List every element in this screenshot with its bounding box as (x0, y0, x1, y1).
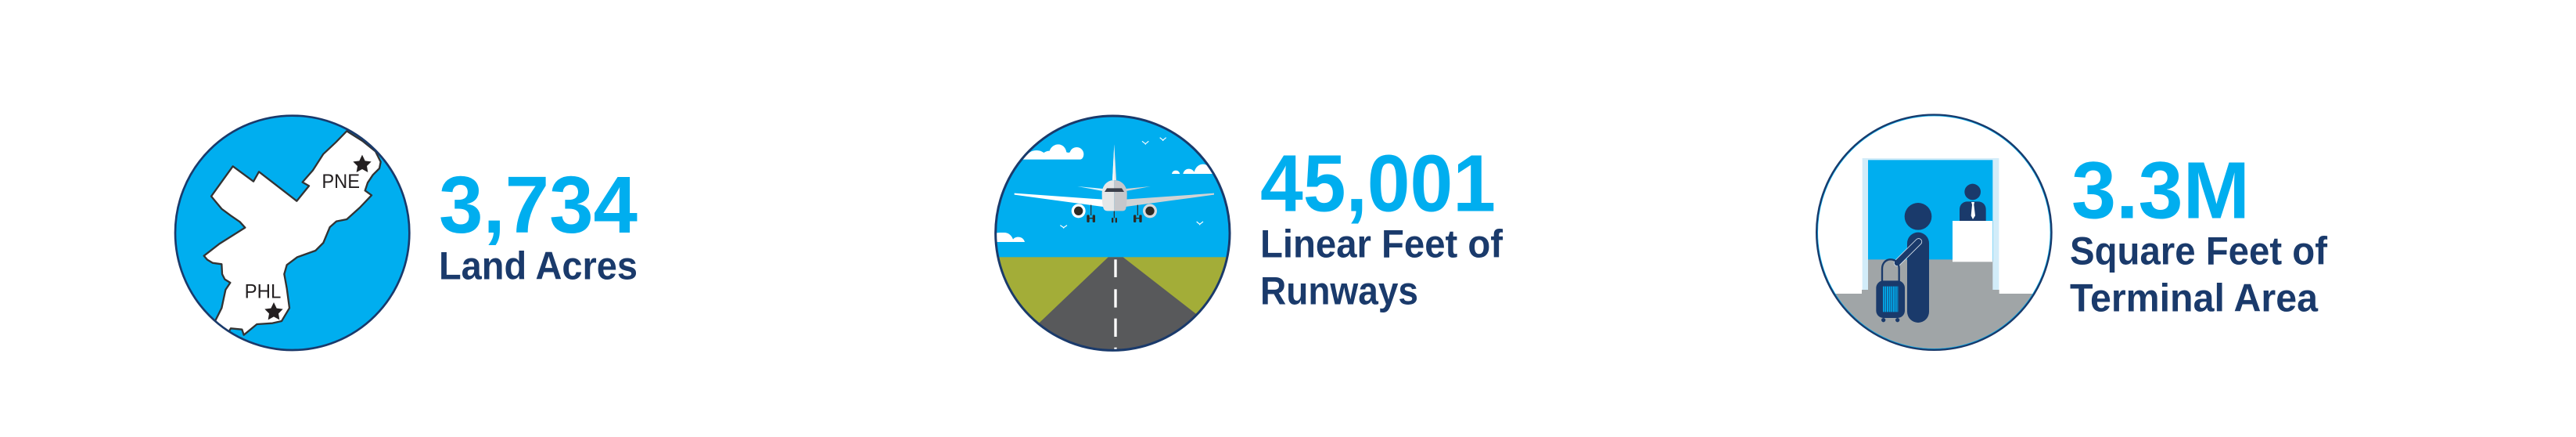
label: Linear Feet of Runways: Linear Feet of (1260, 222, 1503, 266)
icon: plane landing on runway (993, 116, 1234, 363)
birds (1060, 138, 1203, 229)
label: Linear Feet of Runways (1260, 222, 1503, 313)
label: Linear Feet of Runways: Runways (1260, 269, 1418, 313)
traveller and suitcase (1876, 203, 1931, 323)
icon: Philadelphia map with airports (175, 116, 409, 350)
panel: land acres (175, 116, 638, 350)
label: Square Feet of Terminal Area: Square Feet of (2070, 229, 2327, 273)
label: Land Acres: Land Acres (439, 244, 638, 288)
stat: 3.3M: 3.3M (2071, 146, 2250, 235)
stat: 3,734: 3,734 (439, 160, 638, 250)
agent (1953, 184, 1992, 262)
icon: Philadelphia map with airports: PHL (245, 281, 281, 303)
panel: linear feet of runways (993, 116, 1503, 363)
panel: terminal area (1815, 115, 2327, 363)
stat: 45,001: 45,001 (1260, 138, 1496, 229)
clouds (1022, 144, 1083, 160)
label: Square Feet of Terminal Area (2070, 229, 2327, 320)
icon: Philadelphia map with airports: PNE (322, 171, 360, 193)
label: Square Feet of Terminal Area: Terminal Area (2070, 276, 2319, 320)
plane (1015, 144, 1214, 222)
icon: passenger at check-in desk (1815, 115, 2055, 363)
